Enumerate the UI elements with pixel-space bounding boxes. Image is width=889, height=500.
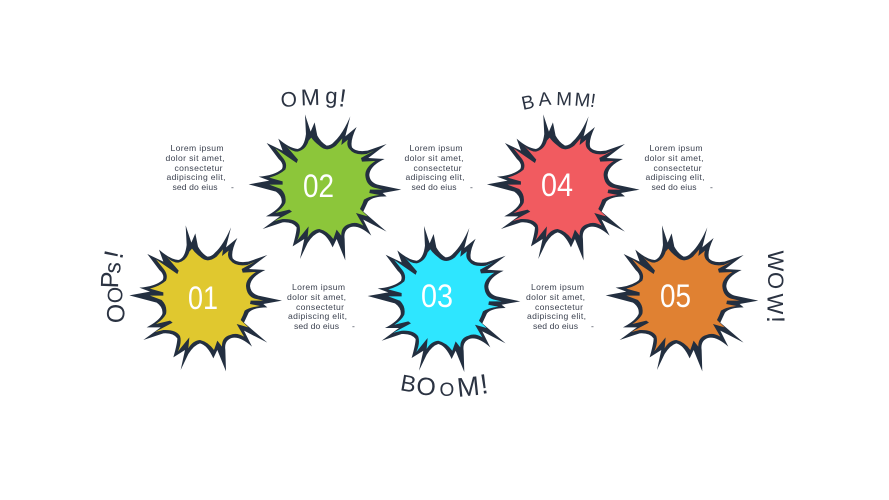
text block right of burst 03 <box>526 282 594 331</box>
word: BAMM!: A <box>537 89 552 111</box>
text block right of burst 04: consectetur <box>654 163 702 173</box>
text block left of burst 02: dolor sit amet, <box>166 153 224 163</box>
text block right of burst 01: dolor sit amet, <box>287 292 346 302</box>
text block right of burst 01: sed do eius <box>294 321 339 331</box>
word: BOOM!: O <box>440 380 454 401</box>
word: OMg!: g <box>325 83 338 109</box>
text block right of burst 01 <box>287 282 355 331</box>
text block left of burst 04: dolor sit amet, <box>404 153 464 163</box>
burst 01 yellow <box>129 225 282 371</box>
word: BOOM!: B <box>399 369 418 398</box>
word: BAMM!: M <box>574 90 591 112</box>
word: BOOM! <box>399 368 490 403</box>
burst 02 green <box>249 114 401 260</box>
word: OMg!: ! <box>337 84 348 113</box>
text block left of burst 02: Lorem ipsum <box>170 143 224 153</box>
text block right of burst 04: adipiscing elit, <box>646 172 704 182</box>
word: OOPS!: O <box>104 287 128 304</box>
word: BAMM!: B <box>520 92 536 115</box>
text block left of burst 04 <box>404 143 473 192</box>
text block right of burst 04: Lorem ipsum <box>650 143 702 153</box>
burst 01 yellow: 01 <box>188 280 218 316</box>
text block right of burst 01: - <box>352 321 355 331</box>
word: WOW!: W <box>763 250 788 272</box>
text block right of burst 01: consectetur <box>296 302 344 312</box>
word: WOW!: W <box>762 294 788 314</box>
text block right of burst 01: Lorem ipsum <box>292 282 345 292</box>
word: OOPS!: ! <box>99 248 129 261</box>
word: BOOM!: O <box>416 373 437 402</box>
burst 03 cyan: 03 <box>421 278 453 314</box>
text block right of burst 03: consectetur <box>535 302 583 312</box>
word: OOPS!: O <box>102 303 131 324</box>
text block left of burst 04: consectetur <box>414 163 462 173</box>
text block left of burst 02: consectetur <box>174 163 223 173</box>
word: WOW!: ! <box>761 316 789 323</box>
text block right of burst 03: - <box>591 321 594 331</box>
text block left of burst 04: - <box>470 182 473 192</box>
word: OOPS!: P <box>96 271 125 289</box>
text block left of burst 02: - <box>231 182 234 192</box>
text block right of burst 03: adipiscing elit, <box>527 311 586 321</box>
word: OMg!: O <box>280 88 298 112</box>
word: BAMM!: ! <box>589 91 597 112</box>
word: WOW!: O <box>763 272 788 289</box>
text block right of burst 01: adipiscing elit, <box>288 311 347 321</box>
text block right of burst 04: dolor sit amet, <box>644 153 704 163</box>
text block left of burst 02: sed do eius <box>172 182 218 192</box>
burst 04 red <box>487 114 640 260</box>
word: OMg! <box>280 83 348 113</box>
burst 05 orange: 05 <box>660 278 691 314</box>
word: BOOM!: ! <box>478 368 490 400</box>
text block left of burst 04: Lorem ipsum <box>410 143 462 153</box>
text block right of burst 03: Lorem ipsum <box>531 282 584 292</box>
text block right of burst 04 <box>644 143 713 192</box>
burst 02 green: 02 <box>303 168 334 204</box>
word: BAMM! <box>520 89 597 115</box>
text block left of burst 02: adipiscing elit, <box>166 172 226 182</box>
burst 04 red: 04 <box>541 167 573 203</box>
word: BOOM!: M <box>455 371 481 403</box>
text block left of burst 02 <box>166 143 234 192</box>
word: WOW! <box>761 250 789 323</box>
word: OOPS!: s <box>99 261 126 274</box>
word: OOPS! <box>96 248 131 324</box>
text block right of burst 03: sed do eius <box>533 321 578 331</box>
text block right of burst 04: - <box>710 182 713 192</box>
text block right of burst 04: sed do eius <box>652 182 696 192</box>
word: OMg!: M <box>300 84 320 110</box>
burst 03 cyan <box>368 226 520 372</box>
text block left of burst 04: adipiscing elit, <box>406 172 464 182</box>
text block left of burst 04: sed do eius <box>412 182 456 192</box>
text block right of burst 03: dolor sit amet, <box>526 292 585 302</box>
burst 05 orange <box>606 225 758 371</box>
word: BAMM!: M <box>556 89 572 111</box>
